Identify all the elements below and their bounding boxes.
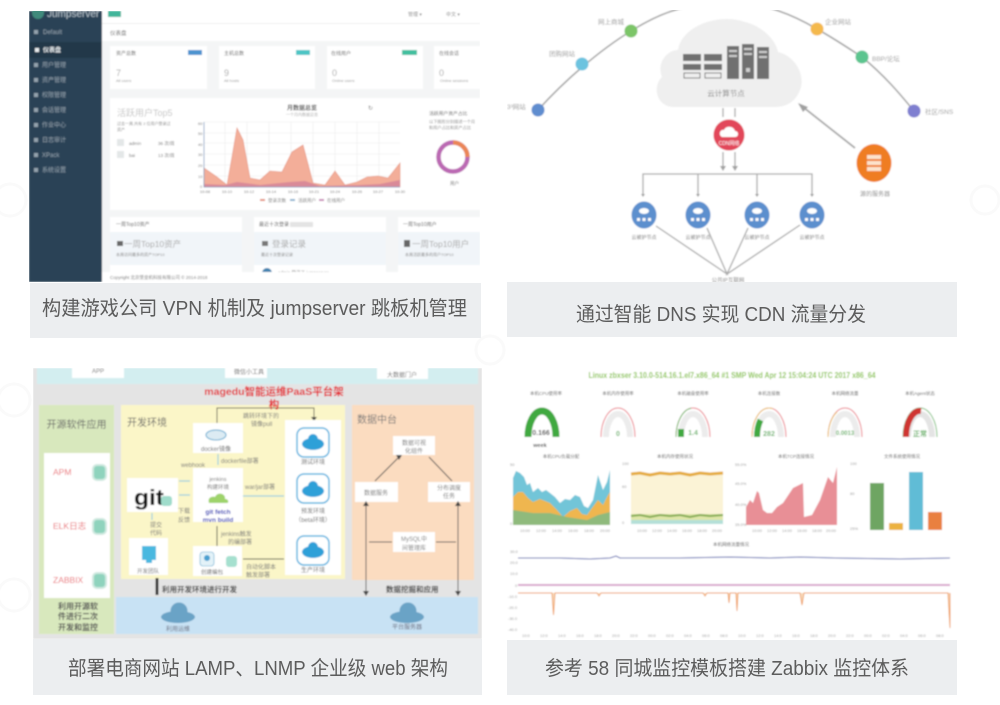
platform band: 平台服务器	[392, 623, 422, 631]
filesystem bar chart	[870, 472, 942, 530]
bottom panels: 本周访问最多的资产TOP10	[116, 251, 165, 257]
memory line chart	[631, 473, 723, 524]
data platform panel: 间管理库	[402, 544, 426, 552]
gauge titles	[530, 390, 935, 397]
panel: smart DNS CDN diagram	[507, 2, 957, 337]
diagram heading: 构	[269, 398, 279, 411]
data platform panel: 任务	[443, 492, 455, 500]
network traffic chart: -40.0	[508, 627, 518, 632]
gauge row	[528, 408, 937, 437]
area chart: 30	[198, 152, 203, 157]
top bar	[102, 11, 480, 41]
caption 3	[33, 639, 482, 695]
chart axis labels: 20:00	[712, 528, 723, 533]
network traffic chart: 18:0	[810, 633, 819, 638]
top band: APP	[92, 369, 104, 375]
arc of sites	[507, 2, 954, 118]
edge nodes	[631, 202, 825, 284]
area chart: 0	[200, 184, 203, 189]
footer: Copyright 北京堡垒机科技有限公司 © 2014-2018	[110, 274, 208, 281]
stat cards: 在线用户	[331, 50, 351, 57]
stat cards: Online users	[332, 78, 354, 83]
gauge values: 0.0013	[836, 431, 855, 437]
chart axis labels: 40.0%	[735, 502, 747, 507]
donut chart: 以下图形分别描述一个月	[429, 118, 475, 125]
network traffic chart: 02:0	[882, 633, 891, 638]
dev environment panel: 测试环境	[301, 458, 325, 466]
sidebar navigation: XPack	[42, 153, 60, 159]
gauge values: 0.166	[532, 430, 550, 437]
chart axis labels: 55.0%	[735, 462, 747, 467]
bottom panels: 一周Top10用户	[403, 221, 437, 228]
stat cards: 7	[116, 68, 121, 78]
sidebar navigation: 系统设置	[42, 166, 66, 174]
dev environment panel: dockerfile部署	[221, 457, 259, 465]
network traffic chart: 12:0	[756, 633, 765, 638]
dev environment panel: 预发环境	[301, 507, 325, 515]
donut chart: 和用户占比和资产占比	[429, 124, 471, 131]
dev environment panel: 代码	[150, 529, 162, 537]
bottom panels: 最近十次登录记录	[261, 251, 293, 257]
dev environment panel: 触发部署	[246, 571, 270, 579]
network traffic chart: -20.0	[508, 605, 518, 610]
dev environment panel: jenkins触发	[220, 530, 252, 538]
network traffic chart: 22:0	[630, 633, 639, 638]
network traffic chart: 18:0	[594, 633, 603, 638]
chart axis labels: 45.0%	[735, 481, 747, 486]
footer	[102, 272, 480, 282]
chart axis labels: 18:00	[812, 528, 823, 533]
chart axis labels: 60	[622, 484, 627, 489]
bottom panels: admin 登录了 jumpserver	[278, 269, 329, 275]
open source panel: 件进行二次	[58, 611, 98, 621]
cloud computing node: 云计算节点	[707, 88, 745, 98]
sidebar navigation	[29, 7, 102, 282]
gauge titles: 本机磁盘使用率	[677, 390, 709, 397]
chart axis labels: 25%	[850, 526, 858, 531]
top bar: 仪表盘	[110, 29, 127, 37]
sidebar navigation: 资产管理	[42, 76, 66, 84]
data platform panel: 数据中台	[357, 413, 397, 426]
sidebar navigation: 会话管理	[42, 106, 66, 114]
chart axis labels: 18:00	[697, 528, 708, 533]
top band: 大数据门户	[387, 371, 417, 379]
chart axis labels: 12:00	[767, 528, 778, 533]
dev environment panel: 开发环境	[127, 416, 167, 429]
chart axis labels: 0	[622, 520, 625, 525]
data platform panel: 数据可视	[402, 439, 426, 447]
gauge values	[532, 429, 927, 449]
network traffic chart: 30.0	[510, 549, 519, 554]
open source panel: ZABBIX	[53, 575, 84, 585]
activity panel	[110, 98, 480, 210]
network traffic chart: 20.0	[510, 560, 519, 565]
data platform panel	[352, 405, 474, 596]
bottom panels: 本周活跃最多的用户TOP10	[405, 251, 454, 257]
bottom panels: 一周Top10用户	[412, 239, 469, 249]
chart axis labels: 100	[850, 461, 857, 466]
panel: jumpserver dashboard	[29, 7, 481, 338]
gauge values: 282	[763, 431, 775, 438]
dev environment panel: 生产环境	[301, 566, 325, 574]
sidebar navigation: Jumpserver	[47, 9, 100, 20]
gauge titles: 本机内存使用率	[602, 390, 634, 397]
stacked area chart	[513, 470, 610, 525]
area chart: 40	[198, 142, 203, 147]
gauge values: week	[532, 443, 548, 449]
platform band: 利用开发环境进行开发	[162, 584, 237, 594]
platform band: 利用运维	[166, 625, 190, 633]
sidebar navigation: Default	[43, 30, 62, 36]
dev environment panel: jenkins	[208, 477, 227, 483]
chart axis labels: 12:00	[652, 528, 663, 533]
sidebar navigation: 用户管理	[42, 61, 66, 69]
tcp bars chart	[746, 467, 837, 525]
chart axis labels: 14:00	[782, 528, 793, 533]
network traffic chart: 10:0	[522, 633, 531, 638]
top band	[37, 368, 478, 384]
connectors	[643, 107, 855, 274]
network traffic chart: 04:0	[684, 633, 693, 638]
donut chart: 用户	[450, 180, 459, 187]
network traffic chart: 14:0	[558, 633, 567, 638]
panel: zabbix dashboard	[507, 368, 957, 695]
network traffic chart: -10.0	[508, 594, 518, 599]
network traffic chart: 00:0	[864, 633, 873, 638]
area chart	[198, 121, 406, 204]
edge nodes: 云被护节点	[799, 234, 825, 241]
caption 4	[507, 640, 957, 695]
data platform panel: 数据服务	[364, 489, 388, 497]
gauge values: 0	[616, 431, 620, 438]
bottom panels: 登录记录	[272, 239, 307, 249]
top bar: 中文 ▾	[446, 11, 460, 18]
caption 1	[30, 283, 481, 338]
dev environment panel: 提交	[150, 521, 162, 529]
bottom panels	[110, 217, 480, 278]
activity panel: 月数据总览	[287, 104, 317, 112]
chart axis labels: 20:00	[600, 528, 611, 533]
network traffic chart: 16:0	[576, 633, 585, 638]
open source panel: 利用开源软	[58, 601, 98, 611]
chart axis labels: 12:00	[536, 528, 547, 533]
diagram heading: magedu智能运维PaaS平台架	[204, 385, 344, 398]
chart axis labels: 10:00	[637, 528, 648, 533]
area chart: 10-21	[309, 189, 320, 194]
arrow heads	[641, 103, 814, 197]
chart axis labels	[510, 461, 858, 533]
gauge titles: 本机连接数	[758, 390, 781, 397]
arc of sites: 3³网站	[507, 102, 526, 111]
chart axis labels: 10:00	[752, 528, 763, 533]
top band: 微信小工具	[234, 368, 264, 376]
bottom panels: 一周Top10资产	[116, 221, 150, 228]
diagram: CDN topology	[507, 2, 957, 284]
dev environment panel: docker镜像	[201, 445, 231, 453]
stat cards: 9	[224, 68, 229, 78]
platform band: 数据挖掘和应用	[386, 584, 438, 594]
dev environment panel: webhook	[180, 463, 206, 469]
activity panel: bai	[129, 153, 135, 158]
donut chart	[429, 110, 475, 187]
panel: PaaS architecture	[33, 368, 482, 695]
gauge values: 1.4	[688, 430, 698, 437]
area chart: 10-26	[352, 189, 363, 194]
donut chart: 活跃用户资产占比	[429, 110, 468, 117]
network traffic chart: 00:0	[648, 633, 657, 638]
network traffic chart: 16:0	[792, 633, 801, 638]
area chart: 10	[198, 174, 203, 179]
network traffic chart: 10:0	[738, 633, 747, 638]
orange source node	[856, 144, 892, 198]
network traffic chart: 0	[515, 583, 518, 588]
dev environment panel	[121, 405, 345, 579]
chart axis labels: 14:00	[667, 528, 678, 533]
network traffic chart: 08:0	[936, 633, 945, 638]
dev environment panel: 镜像pull	[251, 420, 272, 428]
arc of sites: 团购网站	[549, 49, 576, 58]
data platform panel: MySQL中	[401, 535, 427, 543]
dev environment panel: git fetch	[205, 509, 231, 516]
dev environment panel: 开发团队	[137, 567, 159, 575]
area chart: 10-14	[266, 189, 277, 194]
stat cards: Online sessions	[440, 78, 468, 83]
top bar: 管理 ▾	[408, 11, 422, 18]
chart axis labels: 0	[510, 521, 513, 526]
area chart: 10-30	[395, 189, 406, 194]
caption 2	[507, 282, 957, 337]
stat cards: All hosts	[224, 78, 239, 83]
dev environment panel: 创建编包	[201, 568, 223, 576]
area chart: 10-24	[330, 189, 341, 194]
open source panel: APM	[53, 467, 71, 477]
chart axis labels: 14:00	[552, 528, 563, 533]
chart axis labels: 80	[850, 491, 855, 496]
network traffic chart: 02:0	[666, 633, 675, 638]
network traffic chart: 14:0	[774, 633, 783, 638]
open source panel: 开源软件应用	[46, 418, 106, 431]
dev environment panel: 反馈	[178, 516, 190, 524]
diagram heading	[204, 385, 344, 411]
dev environment panel: 跳转环境下的	[243, 412, 279, 420]
dashboard title: Linux zbxser 3.10.0-514.16.1.el7.x86_64 #1 SMP Wed Apr 12 15:04:24 UTC 2017 x86_64	[588, 371, 876, 380]
stat cards: 0	[332, 68, 337, 78]
network traffic chart: 22:0	[846, 633, 855, 638]
chart axis labels: 50	[510, 462, 515, 467]
open source panel: 开发和监控	[58, 622, 98, 632]
screenshot: zabbix monitoring	[507, 368, 957, 640]
dev environment panel: git	[134, 485, 165, 510]
edge nodes: 云被护节点	[744, 234, 770, 241]
area chart: 10-12	[244, 189, 255, 194]
network traffic chart: 04:0	[900, 633, 909, 638]
network traffic chart	[508, 549, 950, 638]
chart axis labels: 20:00	[826, 528, 837, 533]
network traffic chart: 06:0	[918, 633, 927, 638]
bottom panels: 一周Top10资产	[124, 239, 181, 249]
area chart: 10-27	[373, 189, 384, 194]
chart titles: 本机网络流量情况	[713, 541, 749, 548]
bottom panels: 最近十次登录	[259, 221, 289, 228]
chart titles: 本机TCP连接情况	[778, 453, 814, 460]
open source panel	[39, 405, 114, 634]
activity panel: 13 次/周	[158, 152, 175, 159]
area chart: 登录次数	[268, 197, 286, 204]
caption 4: 参考 58 同城监控模板搭建 Zabbix 监控体系	[545, 657, 909, 680]
network traffic chart: 08:0	[720, 633, 729, 638]
arc of sites: 网上商城	[598, 17, 624, 26]
data platform panel: 化组件	[405, 447, 423, 455]
network traffic chart: 06:0	[702, 633, 711, 638]
chart axis labels: 100	[622, 461, 629, 466]
data platform panel: 分布调度	[437, 484, 461, 492]
chart axis labels: 35.0%	[735, 522, 747, 527]
edge nodes: 云被护节点	[631, 234, 657, 241]
sidebar navigation: 日志审计	[42, 136, 66, 144]
dev environment panel: （beta环境）	[295, 516, 331, 524]
activity panel: 活跃用户Top5	[117, 107, 173, 118]
chart axis labels: 16:00	[568, 528, 579, 533]
dev environment panel: 自动化脚本	[246, 563, 276, 571]
network traffic chart: 20:0	[828, 633, 837, 638]
caption 1: 构建游戏公司 VPN 机制及 jumpserver 跳板机管理	[42, 297, 467, 320]
area chart: 活跃用户	[298, 197, 316, 204]
area chart: 10-10	[222, 189, 233, 194]
dev environment panel: 的编部署	[228, 538, 252, 546]
chart titles: 本机内存使用状况	[657, 453, 693, 460]
area chart: 10-08	[200, 189, 211, 194]
network traffic chart: 12:0	[540, 633, 549, 638]
chart axis labels: 16:00	[797, 528, 808, 533]
network traffic chart: 10.0	[510, 571, 519, 576]
arc of sites: 企业网站	[825, 17, 852, 26]
dev environment panel: mvn build	[203, 517, 233, 524]
stat cards	[110, 46, 480, 89]
chart axis labels: 16:00	[682, 528, 693, 533]
gauge values: 正常	[913, 429, 927, 438]
chart titles: 本机CPU负载分配	[543, 453, 580, 460]
red CDN node	[714, 120, 744, 150]
stat cards: 在线会话	[439, 50, 459, 57]
area chart: 在线用户	[327, 197, 345, 204]
area chart: 20	[198, 163, 203, 168]
screenshot: jumpserver dashboard	[29, 7, 480, 282]
cloud computing node	[657, 19, 802, 107]
gauge titles: 本机Agent状态	[905, 390, 935, 397]
platform band	[116, 578, 478, 634]
sidebar navigation: 作业中心	[42, 121, 66, 129]
stat cards: 主机总数	[224, 50, 244, 57]
area chart: 60	[198, 121, 203, 126]
stat cards: 0	[439, 68, 444, 78]
area chart: 50	[198, 131, 203, 136]
dev environment panel: 下载	[178, 507, 190, 515]
activity panel: 36 次/周	[158, 140, 175, 147]
dev environment panel: 构建环境	[207, 483, 229, 491]
area chart: 10-16	[288, 189, 299, 194]
stat cards: All users	[116, 78, 131, 83]
gauge titles: 本机CPU使用率	[530, 390, 562, 397]
orange source node: 源的服务器	[860, 190, 890, 198]
activity panel: admin	[129, 141, 142, 146]
network traffic chart: -30.0	[508, 616, 518, 621]
red CDN node: CDN网络	[719, 140, 739, 147]
activity panel: 过去一周,共有 2 位用户登录过	[117, 120, 171, 126]
arc of sites: 社区/SNS	[925, 107, 954, 116]
activity panel: ↻	[368, 105, 373, 112]
arc of sites: BBP/论坛	[872, 54, 900, 63]
edge nodes: 公共IP互联网	[712, 276, 745, 284]
sidebar navigation: 权限管理	[42, 91, 66, 99]
activity panel: 一个月内数据总览	[286, 111, 318, 117]
chart titles	[543, 453, 920, 548]
diagram: magedu PaaS platform	[33, 368, 482, 639]
network traffic chart: 20:0	[612, 633, 621, 638]
chart axis labels: 18:00	[584, 528, 595, 533]
caption 3: 部署电商网站 LAMP、LNMP 企业级 web 架构	[68, 657, 448, 680]
sidebar navigation: 仪表盘	[43, 46, 61, 54]
open source panel: ELK日志	[53, 521, 87, 531]
caption 2: 通过智能 DNS 实现 CDN 流量分发	[576, 303, 866, 326]
chart titles: 文件系统使用情况	[884, 453, 920, 460]
activity panel: 资产	[117, 126, 125, 132]
gauge titles: 本机网络流量	[832, 390, 859, 397]
dev environment panel: war/jar部署	[244, 483, 275, 491]
stat cards: 资产总数	[116, 50, 136, 57]
edge nodes: 云被护节点	[685, 234, 711, 241]
chart axis labels: 10:00	[520, 528, 531, 533]
